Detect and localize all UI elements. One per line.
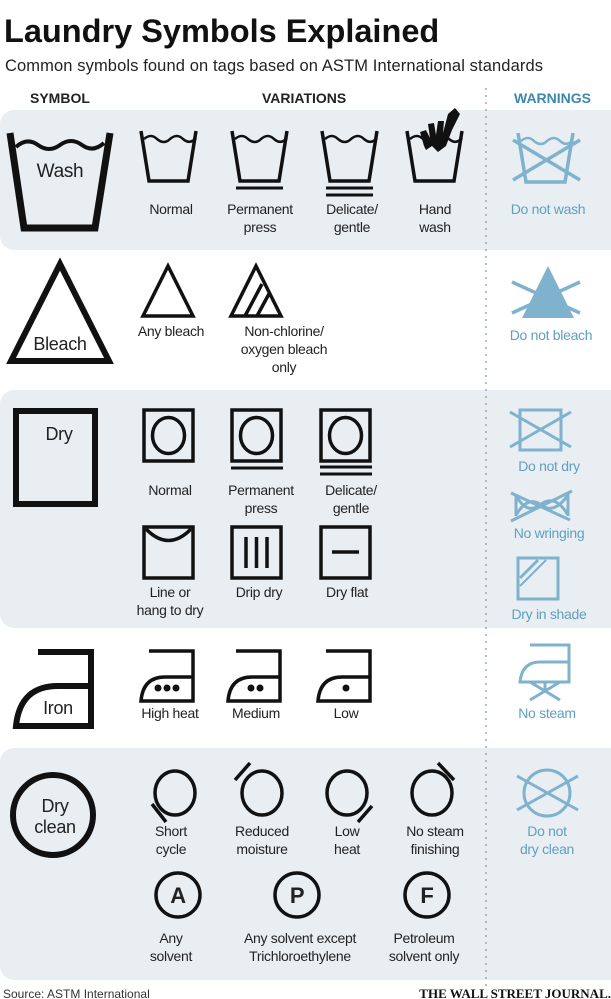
icon: line dry <box>144 527 193 578</box>
wash labels: Permanent <box>227 201 293 217</box>
iron labels: Medium <box>232 705 280 721</box>
icon: solvent P <box>275 873 319 917</box>
bleach labels: Bleach <box>33 334 87 354</box>
dry clean labels: solvent only <box>389 948 459 964</box>
dry clean labels: Trichloroethylene <box>249 948 351 964</box>
dry labels: Permanent <box>228 482 294 498</box>
icon: solvent A <box>156 873 200 917</box>
icon: drip dry <box>232 527 281 578</box>
column headers <box>30 90 591 106</box>
dry labels: Line or <box>150 584 191 600</box>
dry labels: press <box>245 500 278 516</box>
icon: solvent F <box>405 873 449 917</box>
dry clean labels: No steam <box>406 823 464 839</box>
icon: iron medium <box>228 651 280 701</box>
dotted divider <box>485 88 487 988</box>
wash labels: wash <box>418 219 451 235</box>
icon: dry delicate <box>320 410 372 474</box>
dry clean labels: clean <box>34 817 76 837</box>
dry clean labels: Short <box>155 823 187 839</box>
icon: iron low <box>318 651 370 701</box>
panel: wash <box>10 108 580 228</box>
icon: do not bleach <box>512 266 580 318</box>
wash labels: Normal <box>149 201 193 217</box>
dry clean labels: finishing <box>411 841 459 857</box>
icon: dry flat <box>321 527 370 578</box>
bleach labels: Do not bleach <box>510 327 592 343</box>
bleach labels: Non-chlorine/ <box>244 323 324 339</box>
dry clean labels: moisture <box>236 841 288 857</box>
icon: hand wash <box>407 108 462 181</box>
dry clean labels: heat <box>334 841 360 857</box>
dry labels: Delicate/ <box>325 482 377 498</box>
dry clean labels: Reduced <box>235 823 289 839</box>
dry labels: hang to dry <box>137 602 204 618</box>
bleach labels: oxygen bleach <box>241 341 327 357</box>
dry labels: gentle <box>333 500 370 516</box>
wash labels: gentle <box>334 219 371 235</box>
column headers: VARIATIONS <box>262 90 346 106</box>
icon: low heat <box>327 771 372 822</box>
dry labels: Dry flat <box>326 584 368 600</box>
icon: iron big <box>16 652 91 726</box>
dry labels: Do not dry <box>518 458 580 474</box>
iron labels <box>43 698 576 721</box>
icon: non-chlorine bleach <box>231 266 281 316</box>
iron labels: Low <box>334 705 360 721</box>
icon: no steam <box>520 645 569 700</box>
icon: reduced moisture <box>235 763 282 815</box>
dry clean labels: F <box>420 883 434 908</box>
icon: wash big tub <box>10 133 110 228</box>
icon: no steam finishing <box>412 763 454 815</box>
wash labels: Delicate/ <box>326 201 378 217</box>
icon: iron high <box>141 651 193 701</box>
icon: do not wash <box>513 133 580 182</box>
icon: dry permanent press <box>231 410 283 468</box>
dry clean labels: Low <box>335 823 361 839</box>
icon: dry clean big circle <box>13 775 93 855</box>
dry clean labels: A <box>170 883 186 908</box>
icon: any bleach <box>143 266 193 316</box>
icon: dry in shade <box>518 558 558 599</box>
wash labels: Do not wash <box>511 201 585 217</box>
icon: do not dry clean <box>517 770 578 816</box>
wash labels: Hand <box>419 201 451 217</box>
dry clean labels: Do not <box>527 823 567 839</box>
iron labels: No steam <box>518 705 576 721</box>
column headers: WARNINGS <box>514 90 591 106</box>
panel: bleach <box>11 264 580 361</box>
title: Laundry Symbols Explained <box>4 13 439 49</box>
dry clean labels <box>34 796 574 964</box>
bleach labels <box>33 323 592 375</box>
panel: dry clean <box>13 763 578 917</box>
icon: do not dry <box>510 410 571 450</box>
dry clean labels: solvent <box>150 948 193 964</box>
iron labels: Iron <box>43 698 73 718</box>
dry clean labels: Petroleum <box>393 930 455 946</box>
icon: short cycle <box>152 771 195 822</box>
dry clean labels: Dry <box>41 796 69 816</box>
wash labels: Wash <box>37 161 83 182</box>
dry labels <box>45 424 587 622</box>
dry labels: Drip dry <box>236 584 283 600</box>
icon: permanent press tub <box>232 131 287 188</box>
icon: delicate tub <box>322 131 377 195</box>
panel: dry <box>16 410 572 599</box>
dry clean labels: Any <box>159 930 183 946</box>
dry labels: Normal <box>148 482 192 498</box>
dry labels: Dry in shade <box>512 606 587 622</box>
dry clean labels: dry clean <box>520 841 574 857</box>
bleach labels: only <box>272 359 297 375</box>
iron labels: High heat <box>141 705 199 721</box>
icon: dry normal <box>144 410 193 461</box>
icon: dry big square <box>16 411 95 504</box>
icon: no wringing <box>511 491 572 521</box>
bleach labels: Any bleach <box>138 323 204 339</box>
dry clean labels: P <box>290 883 304 908</box>
icon: normal tub <box>141 131 196 181</box>
dry labels: No wringing <box>514 525 584 541</box>
icon: bleach big triangle <box>11 264 109 361</box>
subtitle: Common symbols found on tags based on ASTM International standards <box>5 57 543 75</box>
dry labels: Dry <box>45 424 73 444</box>
panel: iron <box>16 645 569 726</box>
column headers: SYMBOL <box>30 90 90 106</box>
dry clean labels: Any solvent except <box>244 930 356 946</box>
dry clean labels: cycle <box>156 841 187 857</box>
wash labels <box>37 161 585 235</box>
wash labels: press <box>244 219 277 235</box>
